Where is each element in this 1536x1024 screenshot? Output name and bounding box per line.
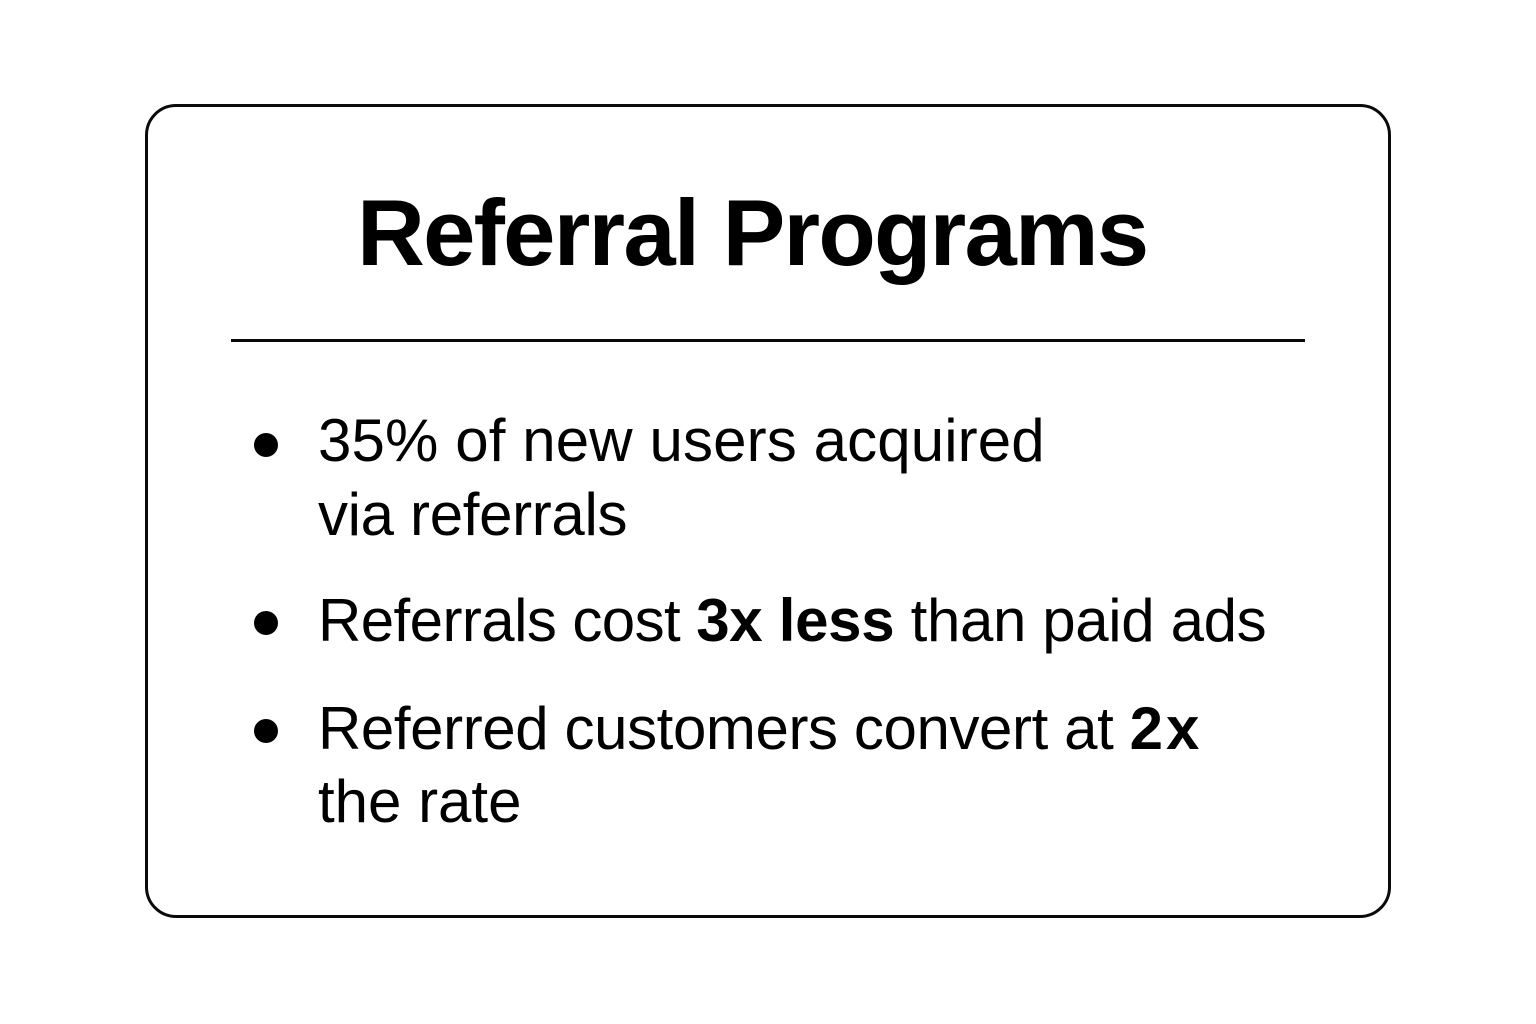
panel: referral programs card	[145, 104, 1391, 918]
bullet dot 2	[254, 611, 278, 635]
bullet 1 text	[318, 407, 1045, 548]
bullet 1 text: via referrals	[318, 481, 627, 548]
bullet 3 text: the rate	[318, 768, 521, 835]
bullet 1 text: 35% of new users acquired	[318, 407, 1045, 474]
bullet 3	[254, 695, 1199, 835]
bullet dot 3	[254, 719, 278, 743]
bullet 2	[254, 587, 1266, 654]
divider	[231, 339, 1305, 342]
bullet 3 text: Referred customers convert at 2x	[318, 695, 1199, 762]
bullet 3 text	[318, 695, 1199, 835]
bullet 2 text: Referrals cost 3x less than paid ads	[318, 587, 1266, 654]
title: Referral Programs	[357, 180, 1147, 285]
bullet 1	[254, 407, 1045, 548]
bullet dot 1	[254, 433, 278, 457]
